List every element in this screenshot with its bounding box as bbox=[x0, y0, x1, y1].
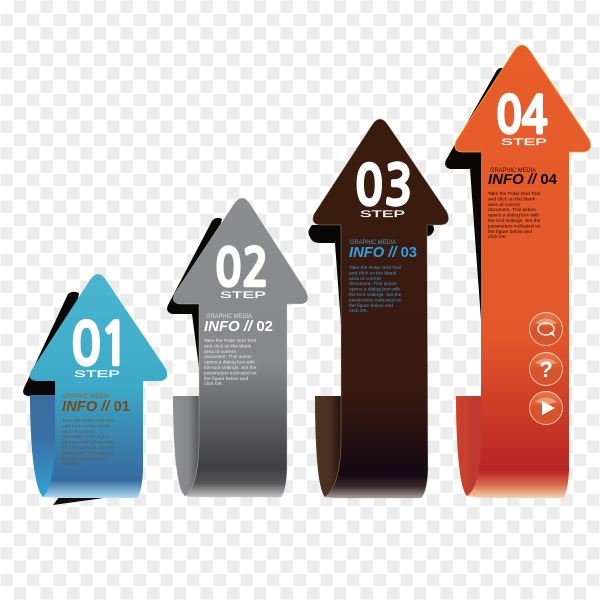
arrow 4: orange step 04 bbox=[445, 45, 591, 498]
arrow 4 body text: the figure below and bbox=[488, 229, 532, 235]
arrow 1 bottom shadow sliver bbox=[53, 496, 104, 505]
arrow 1 body text: Take the Polar Grid Tool bbox=[62, 418, 114, 424]
arrow 3 body text: area of current bbox=[349, 276, 381, 282]
arrow 2 body text: Take the Polar Grid Tool bbox=[204, 338, 256, 344]
arrow 3 body text: the tool settings. Set the bbox=[349, 292, 402, 298]
arrow 2 info heading: INFO // 02 bbox=[204, 318, 273, 335]
arrow 4 body text: opens a dialog box with bbox=[488, 213, 539, 219]
arrow 3 body text: Take the Polar Grid Tool bbox=[349, 265, 401, 271]
arrow 4 body text: document. This action bbox=[488, 207, 536, 213]
arrow 2 body text: the tool settings. Set the bbox=[204, 365, 257, 371]
arrow 3 step label: STEP bbox=[360, 209, 405, 220]
arrow 2 body text: and click on the blank bbox=[204, 343, 252, 349]
arrow 2 body text: opens a dialog box with bbox=[204, 360, 255, 366]
arrow 1 black shadow bbox=[23, 292, 79, 396]
arrow 4 number: 04 bbox=[496, 91, 548, 142]
icon: question mark button: ? bbox=[539, 357, 553, 382]
arrow 4 body text: area of current bbox=[488, 202, 520, 208]
arrow 3 body text: and click on the blank bbox=[349, 270, 397, 276]
arrow 1 step label: STEP bbox=[74, 369, 120, 380]
arrow 2 black shadow bbox=[167, 218, 222, 368]
arrow 1 body text: and click on the blank bbox=[62, 423, 110, 429]
arrow 4 body text: Take the Polar Grid Tool bbox=[488, 191, 540, 197]
arrow 4 info heading: INFO // 04 bbox=[488, 171, 558, 188]
arrow 1 body text: click OK. bbox=[62, 461, 81, 467]
arrow 1 number: 01 bbox=[71, 317, 130, 375]
arrow 4 black shadow bbox=[445, 68, 506, 320]
arrow 3 body text: click OK. bbox=[349, 308, 368, 314]
arrow 4 body text: and click on the blank bbox=[488, 196, 536, 202]
arrow 2 body text: area of current bbox=[204, 349, 236, 355]
arrow 1 body bbox=[30, 274, 167, 498]
arrow 4 body bbox=[455, 45, 591, 498]
arrow 3 body text: the figure below and bbox=[349, 303, 393, 309]
arrow 4 body text: the tool settings. Set the bbox=[488, 218, 541, 224]
arrow 3 subheading: GRAPHIC MEDIA bbox=[350, 239, 397, 246]
arrow 3 body text: document. This action bbox=[349, 281, 397, 287]
arrow 1 body text: the tool settings. Set the bbox=[62, 445, 115, 451]
arrow 3 body text: parameters indicated on bbox=[349, 297, 402, 303]
arrow 4 body text: parameters indicated on bbox=[488, 223, 541, 229]
arrow 3 body text: opens a dialog box with bbox=[349, 287, 400, 293]
arrow 2 number: 02 bbox=[215, 243, 269, 295]
arrow 2 body text: the figure below and bbox=[204, 376, 248, 382]
arrow 2 body text: parameters indicated on bbox=[204, 370, 257, 376]
arrow 1 info heading: INFO // 01 bbox=[62, 398, 130, 415]
arrow 1 body text: parameters indicated on bbox=[62, 450, 115, 456]
arrow 4 subheading: GRAPHIC MEDIA bbox=[490, 167, 537, 174]
arrow 2: grey step 02 bbox=[167, 198, 308, 497]
arrow 3 curled ribbon bbox=[315, 396, 342, 497]
arrow 4 step label: STEP bbox=[501, 137, 547, 148]
arrow 3 info heading: INFO // 03 bbox=[349, 244, 417, 261]
arrow 2 step label: STEP bbox=[220, 290, 266, 301]
arrow 2 body bbox=[173, 198, 308, 497]
arrow 1 curled ribbon bbox=[30, 395, 56, 497]
arrow 3 number: 03 bbox=[355, 159, 413, 214]
arrow 1 body text: the figure below and bbox=[62, 456, 106, 462]
arrow 2 subheading: GRAPHIC MEDIA bbox=[206, 313, 253, 320]
arrow 3 right shadow notch bbox=[426, 224, 434, 236]
arrow 3: brown step 03 bbox=[308, 119, 449, 498]
arrow 2 body text: click OK. bbox=[204, 381, 223, 387]
arrow 1: teal step 01 bbox=[23, 274, 167, 505]
arrow 3 body bbox=[313, 119, 449, 498]
arrow 1 body text: area of current bbox=[62, 429, 94, 435]
arrow 3 black shadow bbox=[308, 225, 341, 325]
arrow 1 subheading: GRAPHIC MEDIA bbox=[63, 393, 110, 400]
arrow 4 curled ribbon bbox=[456, 396, 482, 496]
arrow 2 body text: document. This action bbox=[204, 354, 252, 360]
arrow 1 body text: document. This action bbox=[62, 434, 110, 440]
arrow 4 body text: click OK. bbox=[488, 234, 507, 240]
arrow 2 curled ribbon bbox=[173, 396, 200, 496]
icon: question mark button bbox=[530, 352, 562, 386]
arrow 1 body text: opens a dialog box with bbox=[62, 440, 113, 446]
arrow 4 head outline bbox=[455, 45, 591, 152]
icon: play button bbox=[530, 392, 562, 424]
icon: speech bubble button bbox=[530, 312, 562, 346]
